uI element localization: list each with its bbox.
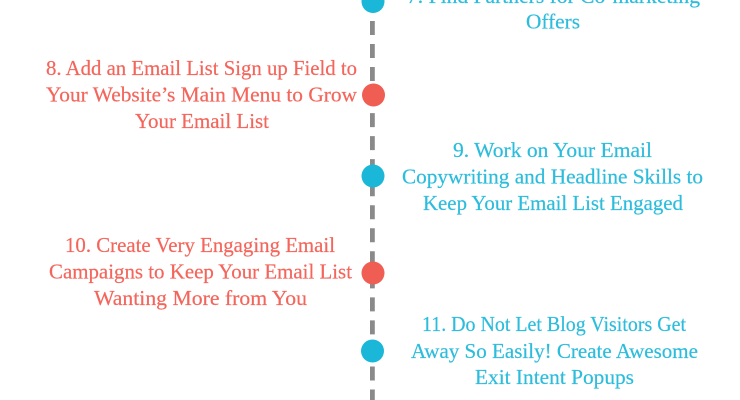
text: step 8 <box>46 56 357 133</box>
text: step 10 <box>49 233 352 310</box>
text: step 8: Your Email List <box>135 109 269 133</box>
text: step 9: 9. Work on Your Email <box>453 138 652 162</box>
text: step 7: Offers <box>526 10 580 34</box>
marker: step 8 red dot <box>362 84 385 106</box>
text: step 7 <box>407 0 700 34</box>
text: step 10: Campaigns to Keep Your Email List <box>49 260 352 284</box>
text: step 11: Exit Intent Popups <box>475 365 634 389</box>
timeline: dashed vertical line <box>370 21 375 400</box>
marker: step 11 blue dot <box>361 340 384 362</box>
text: step 10: 10. Create Very Engaging Email <box>65 233 335 257</box>
text: step 8: 8. Add an Email List Sign up Field to <box>46 56 357 80</box>
marker: step 10 red dot <box>362 262 384 284</box>
marker: step 9 blue dot <box>362 164 384 188</box>
text: step 11: 11. Do Not Let Blog Visitors Get <box>422 312 686 336</box>
text: step 9: Keep Your Email List Engaged <box>423 191 683 215</box>
text: step 11 <box>411 312 698 389</box>
marker: step 7 blue dot <box>362 0 384 13</box>
text: step 9 <box>402 138 703 215</box>
text: step 10: Wanting More from You <box>94 286 307 310</box>
text: step 9: Copywriting and Headline Skills to <box>402 164 703 188</box>
text: step 8: Your Website’s Main Menu to Grow <box>46 82 357 106</box>
text: step 11: Away So Easily! Create Awesome <box>411 339 698 363</box>
